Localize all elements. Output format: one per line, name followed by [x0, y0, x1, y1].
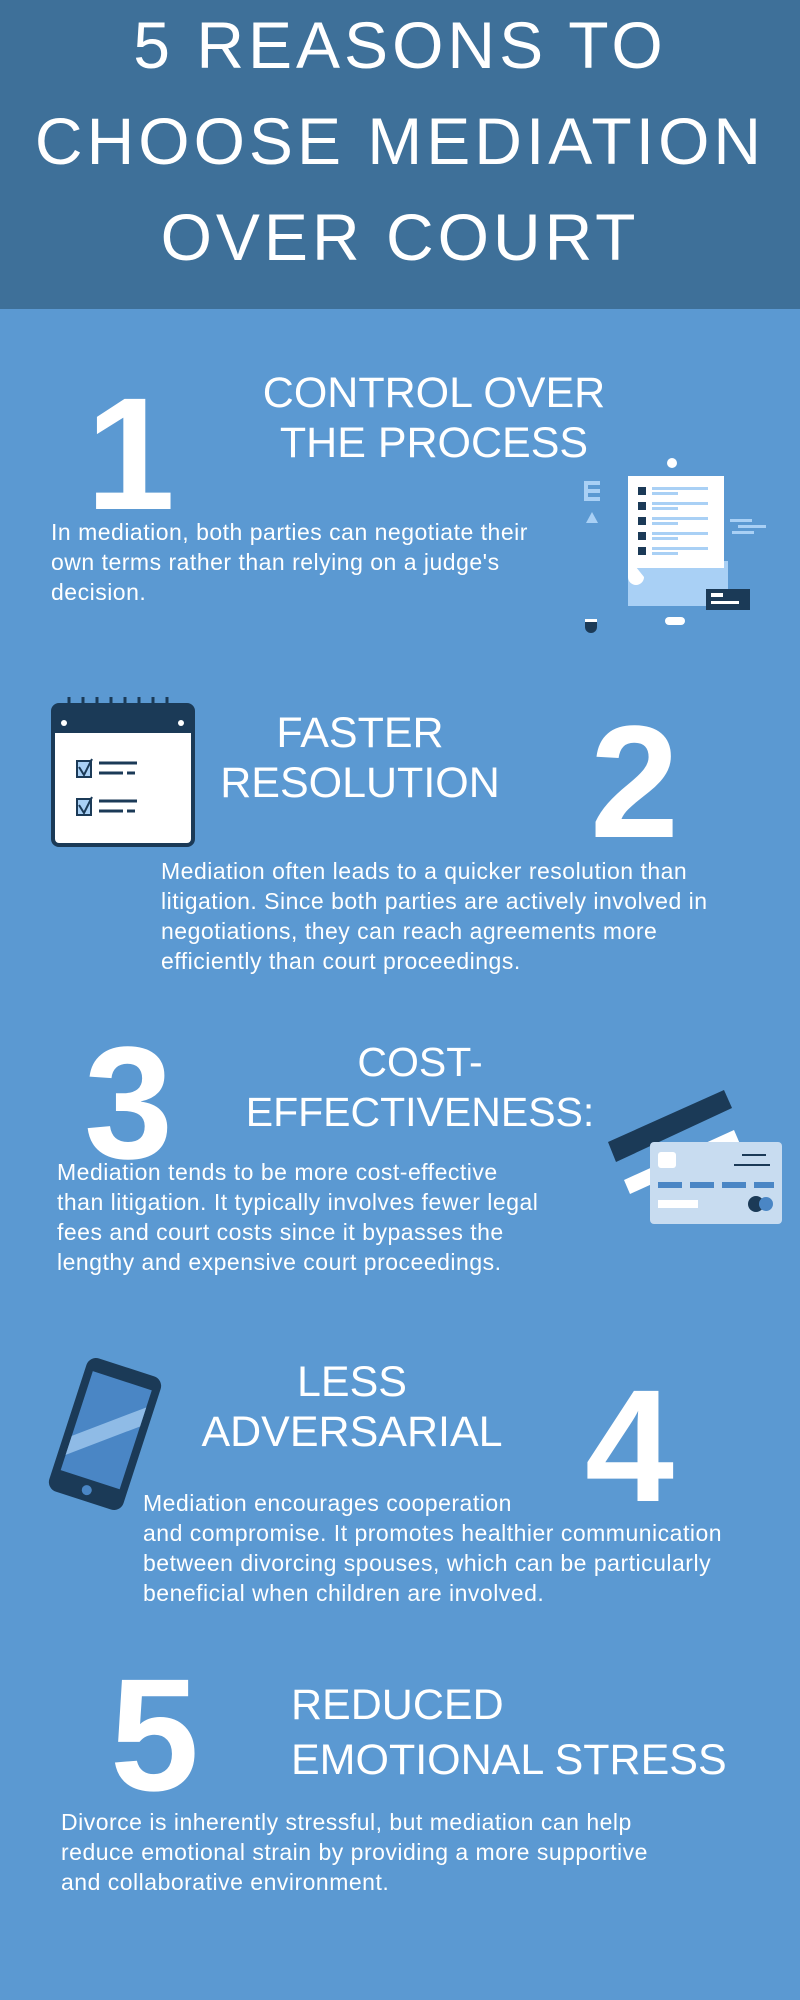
heading 2: [220, 709, 500, 807]
title: OVER COURT: [161, 200, 639, 274]
text 2: efficiently than court proceedings.: [161, 948, 521, 974]
text 4: [143, 1490, 722, 1606]
text 3: Mediation tends to be more cost-effective: [57, 1159, 498, 1185]
header banner: [0, 0, 800, 309]
text 4: and compromise. It promotes healthier communication: [143, 1520, 722, 1546]
heading 5: REDUCED: [291, 1681, 504, 1729]
text 2: [161, 858, 708, 974]
title: CHOOSE MEDIATION: [35, 104, 765, 178]
heading 3: [246, 1039, 594, 1135]
heading 2: RESOLUTION: [220, 759, 500, 807]
number 4: 4: [585, 1356, 670, 1535]
heading 3: COST-: [357, 1039, 483, 1085]
text 4: between divorcing spouses, which can be particularly: [143, 1550, 711, 1576]
icon: credit cards: [608, 1090, 782, 1224]
text 1: decision.: [51, 579, 146, 605]
number 3: 3: [84, 1013, 169, 1192]
section 4: [48, 1356, 722, 1606]
heading 2: FASTER: [276, 709, 444, 757]
text 5: Divorce is inherently stressful, but mediation can help: [61, 1809, 632, 1835]
section 3: [57, 1013, 782, 1275]
section 2: [51, 692, 708, 974]
heading 3: EFFECTIVENESS:: [246, 1089, 594, 1135]
text 4: Mediation encourages cooperation: [143, 1490, 512, 1516]
number 1: 1: [86, 364, 171, 543]
text 3: than litigation. It typically involves fewer legal: [57, 1189, 538, 1215]
number 5: 5: [110, 1645, 195, 1824]
heading 4: [201, 1358, 503, 1456]
heading 1: THE PROCESS: [280, 419, 588, 467]
heading 4: ADVERSARIAL: [201, 1408, 503, 1456]
text 5: reduce emotional strain by providing a more supportive: [61, 1839, 648, 1865]
text 4: beneficial when children are involved.: [143, 1580, 544, 1606]
heading 1: CONTROL OVER: [263, 369, 605, 417]
text 5: [61, 1809, 648, 1895]
heading 5: [291, 1681, 727, 1784]
title: [35, 8, 765, 274]
section 1: [51, 364, 766, 633]
text 3: fees and court costs since it bypasses the: [57, 1219, 504, 1245]
text 1: own terms rather than relying on a judge's: [51, 549, 500, 575]
text 2: litigation. Since both parties are actively involved in: [161, 888, 708, 914]
text 3: [57, 1159, 538, 1275]
icon: calendar checklist: [51, 697, 195, 847]
heading 1: [263, 369, 605, 467]
text 3: lengthy and expensive court proceedings.: [57, 1249, 502, 1275]
text 2: Mediation often leads to a quicker resolution than: [161, 858, 687, 884]
text 2: negotiations, they can reach agreements more: [161, 918, 657, 944]
number 2: 2: [590, 692, 675, 871]
text 1: In mediation, both parties can negotiate their: [51, 519, 528, 545]
title: 5 REASONS TO: [133, 8, 667, 82]
icon: smartphone: [48, 1358, 162, 1510]
section 5: [61, 1645, 727, 1895]
text 5: and collaborative environment.: [61, 1869, 389, 1895]
icon: checklist document: [584, 458, 766, 633]
heading 5: EMOTIONAL STRESS: [291, 1736, 727, 1784]
text 1: [51, 519, 528, 605]
heading 4: LESS: [297, 1358, 407, 1406]
